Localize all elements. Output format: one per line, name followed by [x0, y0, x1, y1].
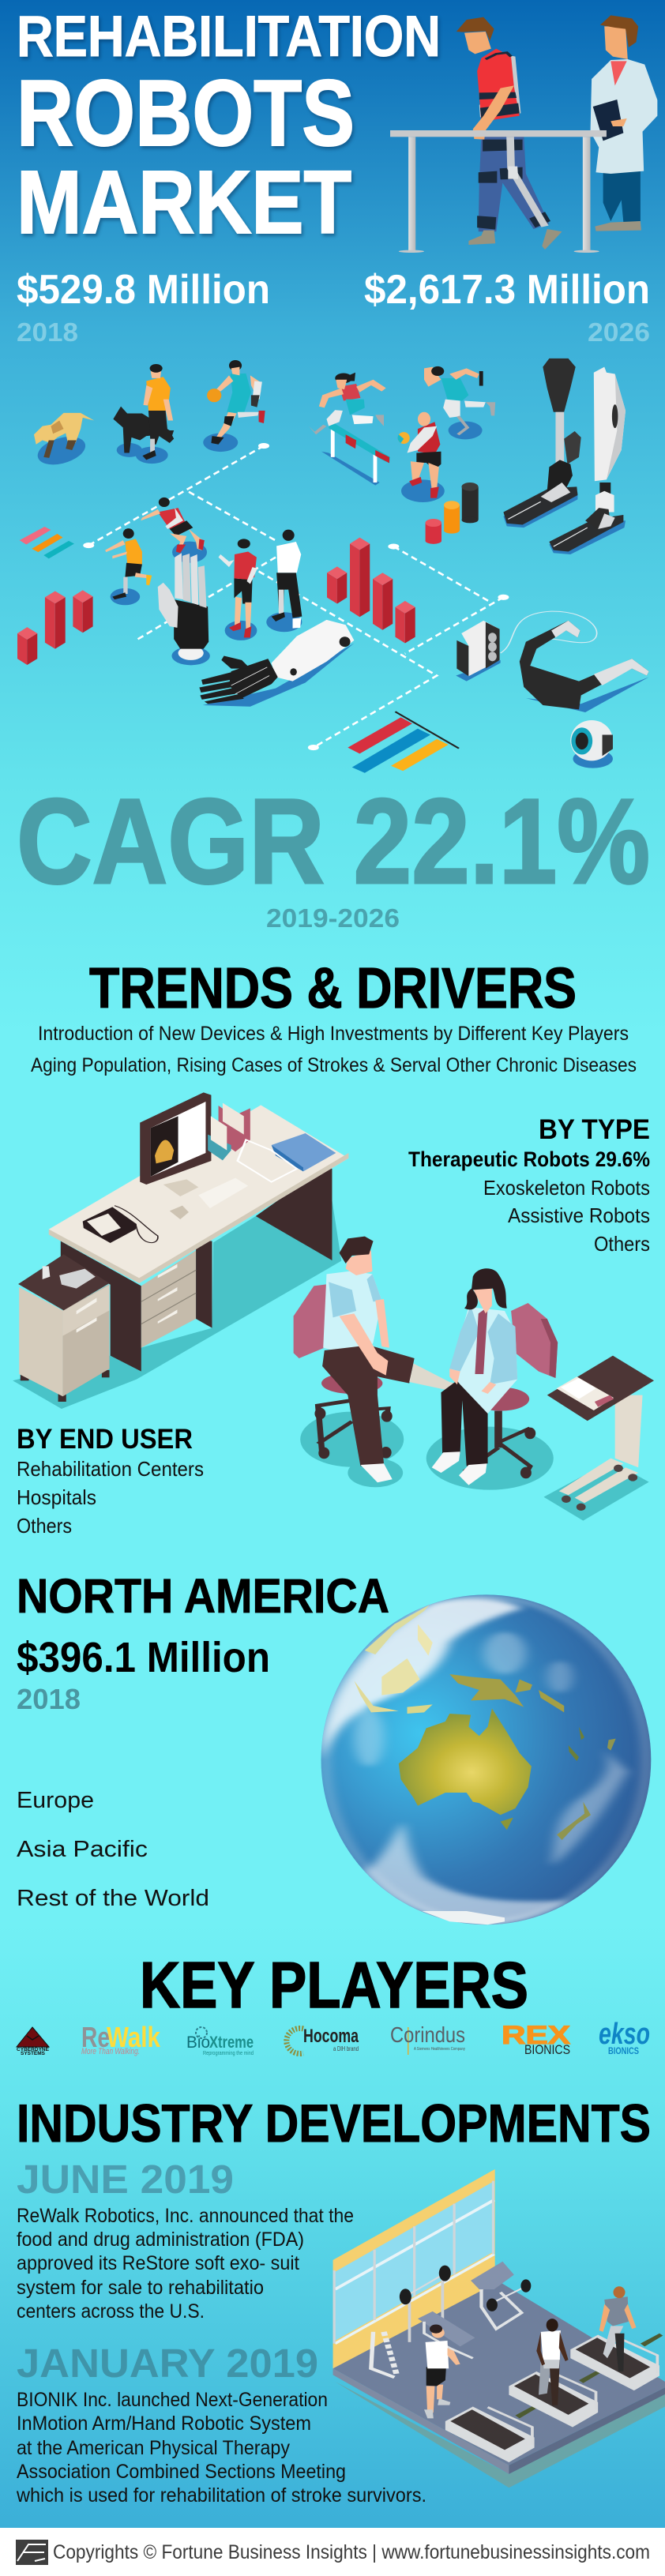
woman and man standing: [219, 530, 302, 640]
floor: [333, 2279, 665, 2488]
overbed table: [547, 1356, 654, 1511]
CAGR figure: 2019-2026: [266, 903, 400, 933]
New Guinea and islands: [449, 1674, 524, 1707]
camera sensor: [570, 720, 613, 768]
market value 2018: 2018: [17, 317, 78, 347]
white prosthetic leg: [549, 367, 626, 554]
logo: BioXtreme: Bio: [186, 2033, 210, 2052]
treadmills: [445, 2334, 663, 2462]
logo: ekso Bionics: BIONICS: [608, 2045, 639, 2056]
other regions: Europe: [17, 1788, 94, 1813]
north america stat: 2018: [17, 1683, 81, 1715]
market value 2026: 2026: [588, 317, 650, 347]
market value 2018: $529.8 Million: [17, 267, 270, 313]
title: REHABILITATION: [17, 5, 441, 69]
illustration: rehabilitation gym: [333, 2169, 665, 2488]
logo: REX Bionics: REX: [502, 2021, 571, 2049]
development: June 2019: system for sale to rehabilitatio: [17, 2277, 264, 2299]
red vest player: [141, 498, 207, 563]
logo: Corindus: A Siemens Healthineers Company: [414, 2047, 465, 2052]
logo: Corindus: [390, 2022, 465, 2055]
red bar chart right: [327, 538, 415, 643]
illustration: clinic desk and prosthetic fitting: [13, 1092, 654, 1521]
tan dog: [30, 413, 94, 471]
floor shadows: [13, 1200, 649, 1521]
robotic forearm: [199, 620, 354, 707]
logo: REX Bionics: [502, 2021, 571, 2057]
trends and drivers heading: TRENDS & DRIVERS: [89, 957, 577, 1020]
robotic visor: [501, 611, 649, 712]
pink orange teal stripes: [20, 527, 74, 558]
trends text: Introduction of New Devices & High Investments by Different Key Players: [38, 1023, 629, 1045]
illustration: patient in exoskeleton with doctor at parallel bars: [390, 15, 657, 253]
development: June 2019: centers across the U.S.: [17, 2300, 205, 2323]
side cabinet: [18, 1254, 110, 1402]
title: MARKET: [17, 152, 351, 252]
other regions: Asia Pacific: [17, 1837, 148, 1862]
man walking with black dog: [113, 364, 174, 464]
development: June 2019: [17, 2157, 354, 2323]
market value 2026: $2,617.3 Million: [364, 267, 650, 313]
Antarctica: [422, 1911, 505, 1924]
logo: Corindus: Corindus: [390, 2022, 465, 2047]
trends text: [31, 1023, 637, 1076]
by type segment list: Others: [594, 1232, 650, 1256]
logo: BioXtreme: [186, 2027, 254, 2056]
by end user segment list: BY END USER: [17, 1424, 193, 1455]
logo: ReWalk: [81, 2021, 161, 2056]
dashed connector lines: [83, 443, 509, 750]
stacked cylinders: [426, 483, 479, 544]
controller box: [456, 621, 501, 682]
gym equipment: [371, 2262, 531, 2377]
logo: ReWalk: More Than Walking.: [81, 2047, 140, 2056]
orange shirt runner: [105, 528, 152, 605]
logo: Hocoma: [287, 2026, 359, 2053]
development: January 2019: Association Combined Sections Meeting: [17, 2461, 346, 2483]
title: [17, 5, 441, 252]
development: June 2019: food and drug administration (FDA): [17, 2229, 304, 2251]
patient: [456, 17, 562, 250]
Southeast Asia: [354, 1680, 399, 1712]
market value 2026: [364, 267, 650, 347]
therapist with chair: [432, 1268, 558, 1485]
key players heading: KEY PLAYERS: [140, 1948, 528, 2022]
man on far treadmill: [599, 2286, 637, 2371]
other regions: [17, 1788, 209, 1911]
development: June 2019: ReWalk Robotics, Inc. announced that the: [17, 2205, 354, 2227]
by end user segment list: Rehabilitation Centers: [17, 1457, 204, 1481]
bald volleyball athlete: [398, 412, 445, 502]
north america stat: NORTH AMERICA: [17, 1569, 389, 1623]
man on treadmill: [536, 2319, 569, 2405]
doctor: [591, 15, 657, 231]
north america stat: $396.1 Million: [17, 1634, 270, 1681]
sprinter: [424, 366, 495, 439]
by end user segment list: [17, 1424, 204, 1538]
hurdling athlete: [309, 373, 390, 486]
development: January 2019: at the American Physical Therapy: [17, 2437, 290, 2459]
footer: [0, 2528, 665, 2576]
black prosthetic leg: [503, 359, 581, 528]
New Zealand: [557, 1802, 591, 1840]
logo: ReWalk: Walk: [107, 2021, 161, 2053]
title: ROBOTS: [17, 61, 355, 166]
development: January 2019: [16, 2341, 426, 2507]
desk: [49, 1105, 348, 1372]
wall with windows: [333, 2169, 495, 2368]
tricolor stripes: [348, 712, 459, 773]
other regions: Rest of the World: [17, 1886, 209, 1911]
development: January 2019: JANUARY 2019: [17, 2341, 318, 2386]
logo: REX Bionics: BIONICS: [524, 2042, 570, 2057]
woman walking: [424, 2325, 460, 2418]
parallel bar: [390, 130, 607, 253]
market value 2018: [17, 267, 270, 347]
by end user segment list: Others: [17, 1514, 72, 1538]
north america stat: [17, 1569, 389, 1715]
by type segment list: BY TYPE: [539, 1114, 650, 1145]
development: January 2019: InMotion Arm/Hand Robotic System: [17, 2413, 311, 2435]
red bar chart left: [17, 590, 93, 665]
by type segment list: [408, 1114, 650, 1256]
robotic upright hand: [158, 553, 210, 665]
by type segment list: Exoskeleton Robots: [483, 1176, 650, 1200]
logo: Cyberdyne: SYSTEMS: [21, 2052, 45, 2056]
desk items: [83, 1092, 336, 1243]
logo: BioXtreme: Reprogramming the mind: [203, 2051, 254, 2056]
development: June 2019: JUNE 2019: [17, 2157, 234, 2202]
development: June 2019: approved its ReStore soft exo- suit: [17, 2252, 299, 2274]
development: January 2019: BIONIK Inc. launched Next-Generation: [17, 2389, 328, 2411]
logo: Cyberdyne: [17, 2027, 50, 2056]
logo: Cyberdyne: CYBERDYNE: [17, 2047, 50, 2052]
logo: BioXtreme: Xtreme: [209, 2033, 254, 2052]
development: January 2019: which is used for rehabilitation of stroke survivors.: [16, 2484, 426, 2507]
Australia: [399, 1708, 532, 1815]
patient with chair: [294, 1237, 491, 1482]
globe: [321, 1594, 651, 1924]
logo: Hocoma: Hocoma: [303, 2026, 359, 2047]
basketball player: [203, 360, 265, 452]
logo: ekso Bionics: [599, 2018, 650, 2056]
logo: Hocoma: a DIH brand: [333, 2045, 359, 2052]
logo: ReWalk: Re: [81, 2021, 110, 2053]
isometric illustration: prosthetics and athletes: [17, 359, 649, 773]
footer logo: [16, 2540, 48, 2565]
by end user segment list: Hospitals: [17, 1485, 96, 1509]
by type segment list: Assistive Robots: [508, 1204, 650, 1227]
